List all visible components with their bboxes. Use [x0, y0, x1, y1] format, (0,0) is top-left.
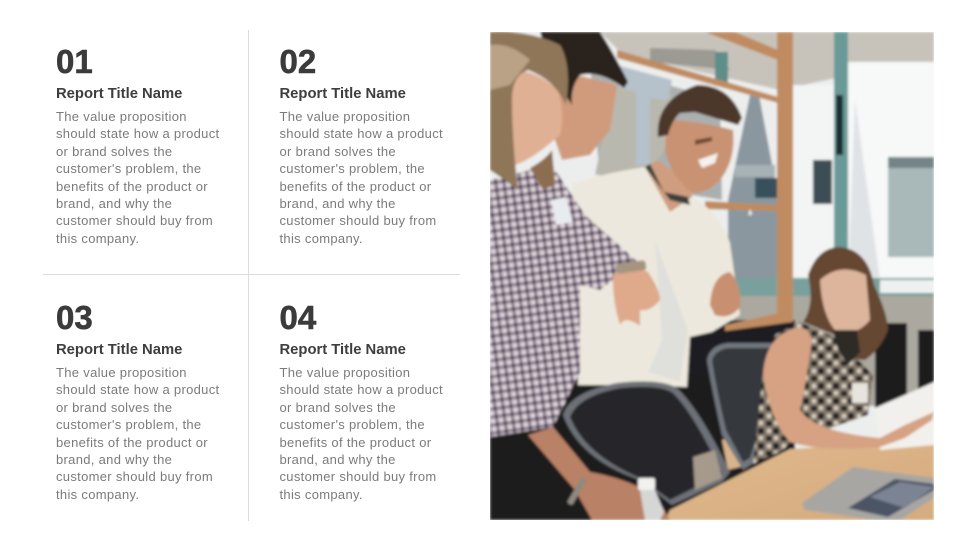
text block: item 03: brand, and why the [56, 452, 172, 467]
office background [490, 32, 934, 449]
number 01: 01 [56, 43, 93, 80]
text block: item 01: this company. [56, 231, 139, 246]
text block: item 01: The value proposition [56, 109, 187, 124]
text block: item 01: or brand solves the [56, 144, 172, 159]
panel: item 03 [56, 299, 219, 502]
text block: item 03: benefits of the product or [56, 435, 208, 450]
panel: item 04 [280, 299, 443, 502]
text block: item 02 [280, 109, 443, 246]
text block: item 03: customer should buy from [56, 469, 213, 484]
text block: item 04: The value proposition [280, 365, 410, 380]
text block: item 02: benefits of the product or [280, 179, 431, 194]
panel: item 01 [56, 43, 219, 246]
number 04: 04 [280, 299, 316, 336]
number 03: 03 [56, 299, 93, 336]
man in cream shirt [572, 85, 742, 387]
text block: item 02: brand, and why the [280, 196, 396, 211]
seated woman [753, 247, 934, 464]
wall letters [728, 95, 780, 322]
text block: item 03: The value proposition [56, 365, 187, 380]
text block: item 04: or brand solves the [280, 400, 396, 415]
laptop [802, 467, 934, 520]
wooden beams [617, 32, 793, 331]
text block: item 04: customer should buy from [280, 469, 437, 484]
photo: team meeting around a table [490, 32, 934, 520]
man with dark hair [540, 32, 628, 160]
front chair [563, 381, 730, 505]
text block: item 01: brand, and why the [56, 196, 172, 211]
teal pole [834, 32, 848, 279]
text block: item 01: benefits of the product or [56, 179, 208, 194]
text block: item 02: should state how a product [280, 126, 443, 141]
text block: item 02: or brand solves the [280, 144, 396, 159]
back chair [707, 343, 780, 470]
text block: item 03: or brand solves the [56, 400, 172, 415]
number 02: 02 [280, 43, 316, 80]
table [665, 382, 934, 520]
heading: item 02: Report Title Name [280, 86, 406, 102]
text block: item 01: customer should buy from [56, 213, 213, 228]
text block: item 03: customer's problem, the [56, 417, 201, 432]
heading: item 03: Report Title Name [56, 342, 182, 358]
text block: item 01 [56, 109, 219, 246]
woman with plaid shirt [490, 32, 640, 437]
text block: item 04 [280, 365, 443, 502]
text block: item 04: this company. [280, 487, 363, 502]
text block: item 02: The value proposition [280, 109, 410, 124]
text block: item 04: benefits of the product or [280, 435, 431, 450]
forearm and hand [528, 427, 670, 520]
text block: item 03: should state how a product [56, 382, 219, 397]
heading: item 01: Report Title Name [56, 86, 182, 102]
text block: item 02: this company. [280, 231, 363, 246]
text block: item 03 [56, 365, 219, 502]
text block: item 04: brand, and why the [280, 452, 396, 467]
text block: item 01: customer's problem, the [56, 161, 201, 176]
heading: item 04: Report Title Name [280, 342, 406, 358]
text block: item 02: customer should buy from [280, 213, 437, 228]
text block: item 04: customer's problem, the [280, 417, 425, 432]
lower wall and dark cabinets [490, 278, 934, 520]
text block: item 02: customer's problem, the [280, 161, 425, 176]
watch hand [613, 260, 660, 326]
panel: item 02 [280, 43, 443, 246]
text block: item 04: should state how a product [280, 382, 443, 397]
water bottle [638, 478, 664, 520]
text block: item 01: should state how a product [56, 126, 219, 141]
text block: item 03: this company. [56, 487, 139, 502]
